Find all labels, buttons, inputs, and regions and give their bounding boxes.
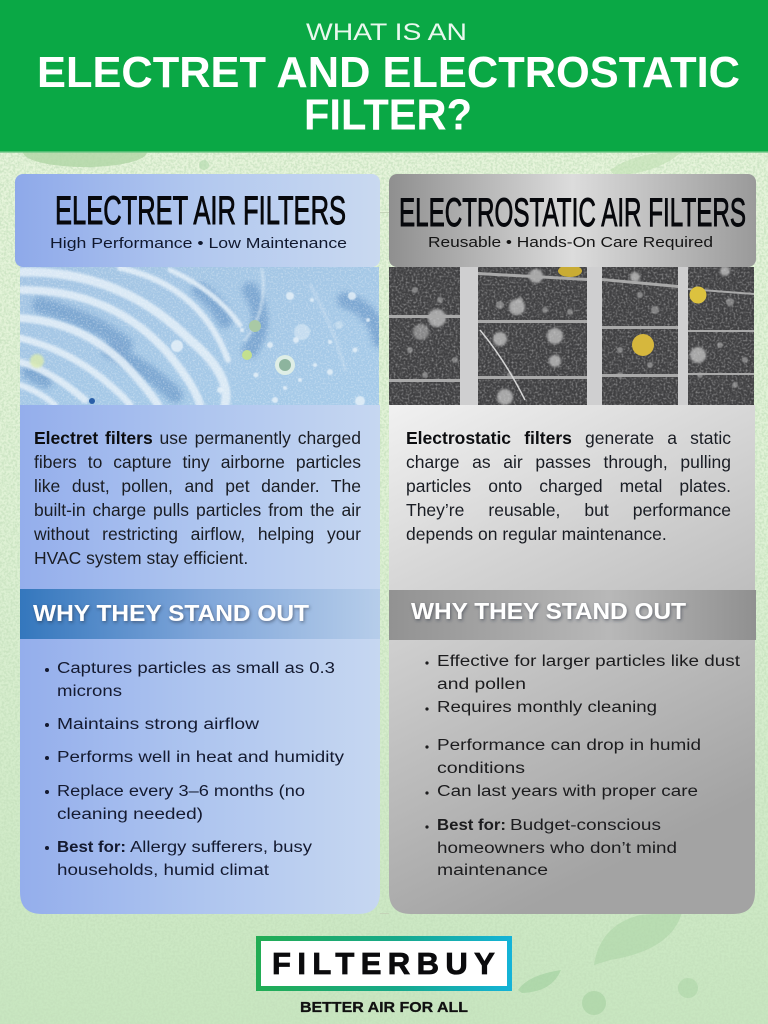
description: electrostatic: charge as air passes through, pulling [406, 452, 731, 472]
description: electrostatic: particles onto charged metal plates. [406, 476, 731, 496]
bullet list: electret [45, 660, 344, 879]
bullet list: electrostatic: Performance can drop in humid [437, 737, 701, 754]
description: electret: fibers to capture tiny airborne particles [34, 452, 361, 472]
subheading: electrostatic: Reusable • Hands-On Care Required [428, 234, 713, 251]
bullet list: electrostatic: Budget-conscious [510, 817, 661, 834]
header: electret [15, 174, 380, 267]
section band: why they stand out (electret) [20, 589, 380, 639]
panel body: electret [20, 405, 380, 914]
description: electret [34, 426, 361, 570]
description: electrostatic [406, 426, 731, 546]
description: electret: HVAC system stay efficient. [34, 548, 248, 568]
description: electret: Electret filters use permanently charged [34, 428, 361, 448]
bullet list: electrostatic: homeowners who don’t mind [437, 840, 677, 857]
bullet list: electrostatic: conditions [437, 760, 525, 777]
panel: electret air filters [15, 174, 380, 914]
bullet list: electret: Captures particles as small as 0.3 [57, 660, 335, 677]
section band: why they stand out (electrostatic) [389, 590, 756, 640]
bullet list: electrostatic: Can last years with proper care [437, 783, 698, 800]
panel: electrostatic air filters [389, 174, 756, 914]
description: electret: like dust, pollen, and pet dander. The [34, 476, 361, 496]
bullet list: electret: Allergy sufferers, busy [130, 839, 312, 856]
bullet list: electrostatic: Requires monthly cleaning [437, 699, 657, 716]
bullet list: electrostatic [425, 653, 741, 879]
section band: why they stand out (electret): WHY THEY STAND OUT [33, 600, 309, 626]
bullet list: electret: Best for: [57, 839, 126, 856]
subheading: electret: High Performance • Low Maintenance [50, 235, 347, 252]
logo: filterbuy: FILTERBUY [272, 946, 501, 981]
tagline: BETTER AIR FOR ALL [300, 999, 468, 1016]
description: electrostatic: They’re reusable, but performance [406, 500, 731, 520]
description: electret: without restricting airflow, helping your [34, 524, 361, 544]
bullet list: electrostatic: Effective for larger particles like dust [437, 653, 741, 670]
bullet list: electrostatic: maintenance [437, 862, 548, 879]
bullet list: electret: Replace every 3–6 months (no [57, 783, 305, 800]
description: electret: built-in charge pulls particles from the air [34, 500, 361, 520]
bullet list: electret: microns [57, 683, 122, 700]
description: electrostatic: Electrostatic filters generate a static [406, 428, 731, 448]
bullet list: electret: households, humid climat [57, 862, 270, 879]
bullet list: electret: Performs well in heat and humidity [57, 749, 344, 766]
panel body: electrostatic [389, 405, 755, 914]
bullet list: electret: Maintains strong airflow [57, 716, 260, 733]
header: electrostatic [389, 174, 756, 267]
title: kicker: WHAT IS AN [306, 19, 467, 46]
title: main heading: ELECTRET AND ELECTROSTATIC [37, 48, 740, 97]
logo: filterbuy [256, 936, 512, 1016]
title: main heading [37, 48, 740, 140]
photo: electret fibers [20, 267, 380, 406]
title banner [0, 0, 768, 153]
title: main heading: FILTER? [304, 90, 472, 140]
bullet list: electrostatic: and pollen [437, 676, 526, 693]
bullet list: electret: cleaning needed) [57, 806, 203, 823]
section band: why they stand out (electrostatic): WHY THEY STAND OUT [411, 598, 686, 624]
heading: electret air filters: ELECTRET AIR FILTERS [55, 189, 346, 233]
description: electrostatic: depends on regular maintenance. [406, 524, 667, 544]
bullet list: electrostatic: Best for: [437, 817, 506, 834]
photo: electrostatic metal plates [389, 265, 754, 405]
